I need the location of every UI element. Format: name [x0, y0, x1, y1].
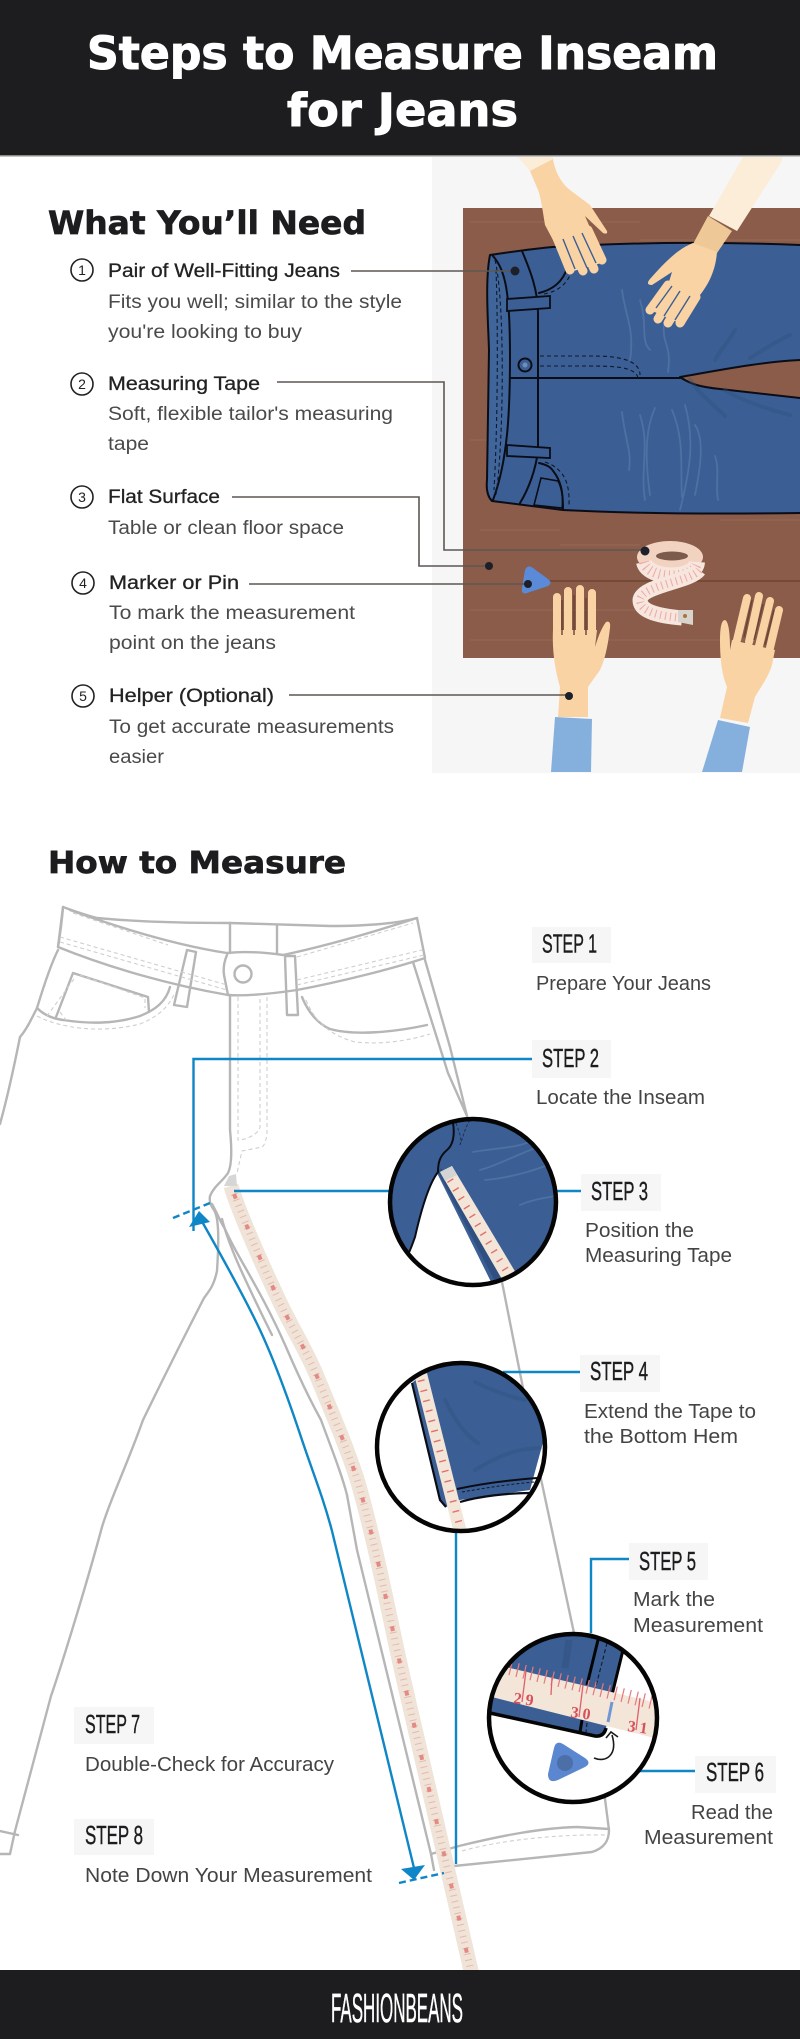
step 4 leader	[456, 1372, 580, 1864]
item 2: measuring tape	[71, 373, 650, 556]
step 6 leader	[640, 1770, 695, 1772]
zoom circle: mark measurement	[486, 1632, 660, 1804]
zoom circle: tape position at crotch	[388, 1116, 558, 1288]
header banner: Steps to Measure Inseam	[87, 27, 718, 80]
item 3: flat surface: 3	[78, 489, 86, 505]
step 7: Double-Check for Accuracy	[85, 1754, 334, 1776]
measuring tape coil	[637, 541, 703, 625]
step 4: the Bottom Hem	[584, 1426, 738, 1448]
zoom circle: mark measurement: 31	[626, 1718, 653, 1738]
step 8: Note Down Your Measurement	[85, 1865, 372, 1887]
step 6: Measurement	[644, 1827, 773, 1849]
step 5: Mark the	[633, 1589, 715, 1611]
step 2: Locate the Inseam	[536, 1087, 705, 1109]
bottom left hand	[551, 589, 610, 772]
top right hand	[648, 157, 782, 325]
step 8	[74, 1819, 372, 1887]
step 3 leader	[234, 1190, 581, 1192]
step 6: STEP 6	[706, 1757, 764, 1787]
step 1: Prepare Your Jeans	[536, 973, 711, 995]
top left hand	[518, 157, 607, 272]
step 1	[532, 927, 711, 995]
zoom circle: tape at hem	[374, 1360, 548, 1534]
step 5	[629, 1543, 763, 1637]
item 2: measuring tape: 2	[78, 376, 86, 392]
step 6	[644, 1756, 776, 1849]
item 1: jeans: Pair of Well-Fitting Jeans	[108, 260, 340, 282]
item 1: jeans: 1	[78, 262, 86, 278]
item 4: marker or pin: point on the jeans	[109, 633, 276, 654]
step 5: Measurement	[633, 1615, 763, 1637]
step 1: STEP 1	[542, 928, 597, 958]
step 4	[580, 1355, 756, 1448]
header banner	[0, 0, 800, 156]
step 2: STEP 2	[542, 1043, 599, 1073]
item 5: helper: To get accurate measurements	[109, 717, 394, 738]
step 4: Extend the Tape to	[584, 1401, 756, 1423]
item 5: helper	[72, 685, 573, 768]
step 2	[532, 1040, 705, 1109]
footer with logo: FASHIONBEANS	[331, 1985, 463, 2031]
item 5: helper: 5	[79, 688, 87, 704]
step 4: STEP 4	[590, 1356, 648, 1386]
header banner: for Jeans	[287, 84, 518, 137]
step 5: STEP 5	[639, 1546, 696, 1576]
item 3: flat surface: Flat Surface	[108, 486, 220, 508]
item 3: flat surface	[71, 486, 493, 570]
heading: how to measure: How to Measure	[48, 846, 346, 881]
item 5: helper: easier	[109, 747, 165, 768]
item 4: marker or pin: 4	[79, 575, 87, 591]
jeans	[487, 243, 800, 514]
item 1: jeans: you're looking to buy	[108, 322, 303, 343]
step 2 leader and top arrow	[173, 1059, 532, 1231]
marker chalk	[522, 566, 550, 593]
footer with logo	[0, 1970, 800, 2039]
item 2: measuring tape: tape	[108, 434, 149, 455]
step 3: Measuring Tape	[585, 1245, 732, 1267]
step 3: Position the	[585, 1220, 694, 1242]
heading: what you'll need: What You’ll Need	[48, 204, 366, 242]
item 4: marker or pin	[72, 572, 532, 654]
zoom circle: mark measurement: 29	[512, 1690, 539, 1710]
item 2: measuring tape: Measuring Tape	[108, 373, 260, 395]
item 4: marker or pin: Marker or Pin	[109, 572, 239, 594]
step 7	[74, 1707, 334, 1776]
step 8: STEP 8	[85, 1820, 143, 1850]
double arrow: inseam length	[200, 1218, 444, 1883]
step 5 leader	[591, 1559, 629, 1633]
item 5: helper: Helper (Optional)	[109, 685, 274, 707]
illustration panel: jeans on table with hands	[432, 157, 800, 773]
item 1: jeans: Fits you well; similar to the style	[108, 292, 402, 313]
step 3	[581, 1174, 732, 1267]
bottom right hand	[702, 596, 779, 772]
zoom circle: mark measurement: 30	[569, 1704, 596, 1724]
step 3: STEP 3	[591, 1176, 648, 1206]
item 1: jeans	[71, 259, 520, 343]
line drawing: jeans outline	[0, 907, 609, 1870]
table surface	[463, 208, 800, 658]
step 6: Read the	[691, 1802, 773, 1824]
long measuring tape	[224, 1174, 472, 1975]
item 4: marker or pin: To mark the measurement	[109, 603, 356, 624]
item 3: flat surface: Table or clean floor space	[108, 518, 344, 539]
step 7: STEP 7	[85, 1709, 140, 1739]
item 2: measuring tape: Soft, flexible tailor's measuring	[108, 404, 393, 425]
